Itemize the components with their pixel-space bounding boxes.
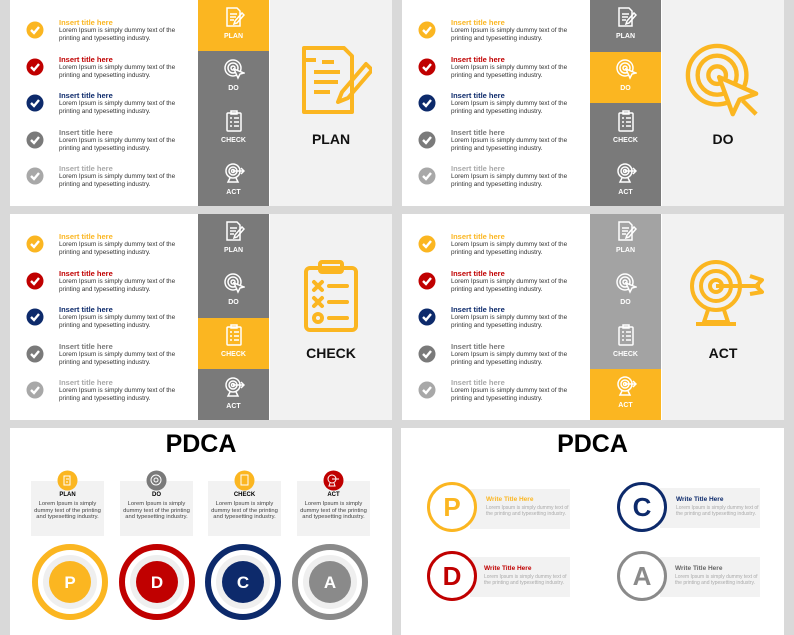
card: plan: Lorem Ipsum is simply dummy text of the printing and typesetting industry.	[34, 501, 101, 520]
item P: Lorem Ipsum is simply dummy text of	[486, 505, 569, 511]
checklist: Lorem Ipsum is simply dummy text of the	[59, 64, 175, 71]
item C: Lorem Ipsum is simply dummy text of	[676, 505, 759, 511]
card: act: Lorem Ipsum is simply dummy text of the printing and typesetting industry.	[300, 501, 367, 520]
side: act icon and label	[662, 214, 784, 420]
checklist: Insert title here	[59, 128, 113, 137]
card: act	[297, 481, 370, 536]
checklist: printing and typesetting industry.	[451, 322, 543, 329]
item P: Write Title Here	[486, 496, 533, 503]
checklist: printing and typesetting industry.	[451, 108, 543, 115]
checklist: Lorem Ipsum is simply dummy text of the	[451, 64, 567, 71]
ring circles: P	[64, 573, 76, 592]
side: plan icon and label: PLAN	[312, 131, 350, 147]
item A	[617, 551, 760, 601]
checklist: printing and typesetting industry.	[59, 181, 151, 188]
panel: check	[10, 214, 392, 420]
item A: Lorem Ipsum is simply dummy text of	[675, 574, 758, 580]
checklist: printing and typesetting industry.	[59, 322, 151, 329]
checklist: Lorem Ipsum is simply dummy text of the	[451, 27, 567, 34]
ring circles	[32, 544, 368, 620]
card: do: Lorem Ipsum is simply dummy text of the printing and typesetting industry.	[123, 501, 190, 520]
checklist: Lorem Ipsum is simply dummy text of the	[59, 387, 175, 394]
checklist: Lorem Ipsum is simply dummy text of the	[59, 27, 175, 34]
checklist: Insert title here	[451, 164, 505, 173]
checklist: Lorem Ipsum is simply dummy text of the	[59, 137, 175, 144]
step column: ACT	[226, 189, 241, 196]
checklist: Insert title here	[59, 18, 113, 27]
ring circles: A	[324, 573, 336, 592]
item P: the printing and typesetting industry.	[486, 511, 566, 517]
item C: Write Title Here	[676, 496, 723, 503]
checklist: Lorem Ipsum is simply dummy text of the	[59, 314, 175, 321]
checklist: Lorem Ipsum is simply dummy text of the	[451, 387, 567, 394]
item A: Write Title Here	[675, 565, 722, 572]
checklist: Insert title here	[451, 342, 505, 351]
title: PDCA	[557, 430, 628, 458]
checklist: printing and typesetting industry.	[451, 359, 543, 366]
checklist: Lorem Ipsum is simply dummy text of the	[59, 278, 175, 285]
item P: P	[443, 492, 461, 522]
side: act icon and label: ACT	[709, 345, 737, 361]
card: do: DO	[152, 492, 161, 498]
checklist: printing and typesetting industry.	[59, 108, 151, 115]
checklist: Insert title here	[59, 305, 113, 314]
checklist: Lorem Ipsum is simply dummy text of the	[451, 278, 567, 285]
step column: CHECK	[613, 137, 638, 144]
step column: CHECK	[221, 137, 246, 144]
step column: PLAN	[616, 247, 635, 254]
side: do icon and label: DO	[712, 131, 734, 147]
checklist: Insert title here	[451, 18, 505, 27]
step column	[590, 0, 661, 206]
panel: act	[402, 214, 784, 420]
checklist: Insert title here	[59, 232, 113, 241]
step column: ACT	[618, 189, 633, 196]
step column	[198, 0, 269, 206]
checklist: printing and typesetting industry.	[59, 72, 151, 79]
checklist	[26, 18, 175, 188]
step column: PLAN	[224, 33, 243, 40]
checklist	[26, 232, 175, 402]
checklist: printing and typesetting industry.	[451, 181, 543, 188]
item A: the printing and typesetting industry.	[675, 580, 755, 586]
card: check: Lorem Ipsum is simply dummy text of the printing and typesetting industry.	[211, 501, 278, 520]
item A: A	[633, 561, 651, 591]
step column	[198, 214, 269, 420]
item D: Write Title Here	[484, 565, 531, 572]
checklist: Lorem Ipsum is simply dummy text of the	[451, 241, 567, 248]
step column: PLAN	[224, 247, 243, 254]
checklist: Insert title here	[59, 55, 113, 64]
checklist: printing and typesetting industry.	[451, 145, 543, 152]
side: check icon and label	[270, 214, 392, 420]
card: check: CHECK	[234, 492, 255, 498]
checklist: printing and typesetting industry.	[451, 286, 543, 293]
checklist: Lorem Ipsum is simply dummy text of the	[451, 351, 567, 358]
checklist: Insert title here	[59, 378, 113, 387]
step column: CHECK	[613, 351, 638, 358]
item P	[427, 482, 570, 532]
checklist: Lorem Ipsum is simply dummy text of the	[451, 173, 567, 180]
step column: CHECK	[221, 351, 246, 358]
checklist: Insert title here	[59, 164, 113, 173]
checklist: Lorem Ipsum is simply dummy text of the	[451, 100, 567, 107]
step column: DO	[228, 299, 239, 306]
checklist: Insert title here	[451, 269, 505, 278]
card: plan: PLAN	[59, 492, 76, 498]
checklist: Insert title here	[451, 55, 505, 64]
checklist: Lorem Ipsum is simply dummy text of the	[451, 314, 567, 321]
checklist: printing and typesetting industry.	[59, 35, 151, 42]
card: act: ACT	[327, 492, 340, 498]
card: plan	[31, 481, 104, 536]
checklist: Insert title here	[59, 342, 113, 351]
ring circles: C	[237, 573, 249, 592]
checklist: printing and typesetting industry.	[451, 72, 543, 79]
checklist: Insert title here	[59, 269, 113, 278]
item D: D	[443, 561, 461, 591]
item D	[427, 551, 570, 601]
step column: DO	[620, 299, 631, 306]
step column: DO	[620, 85, 631, 92]
checklist: printing and typesetting industry.	[59, 249, 151, 256]
title: PDCA	[166, 430, 236, 458]
side: check icon and label: CHECK	[306, 345, 356, 361]
item C: the printing and typesetting industry.	[676, 511, 756, 517]
checklist: Insert title here	[59, 91, 113, 100]
side: do icon and label	[662, 0, 784, 206]
checklist: printing and typesetting industry.	[59, 395, 151, 402]
checklist: printing and typesetting industry.	[59, 286, 151, 293]
checklist: printing and typesetting industry.	[451, 395, 543, 402]
panel: pdca grid	[401, 428, 784, 635]
checklist	[418, 232, 567, 402]
panel: plan	[10, 0, 392, 206]
checklist: Insert title here	[451, 91, 505, 100]
card: do	[120, 481, 193, 536]
side: plan icon and label	[270, 0, 392, 206]
checklist: Insert title here	[451, 232, 505, 241]
step column	[590, 214, 661, 420]
checklist: Lorem Ipsum is simply dummy text of the	[59, 351, 175, 358]
checklist: printing and typesetting industry.	[451, 249, 543, 256]
step column: DO	[228, 85, 239, 92]
ring circles: D	[151, 573, 163, 592]
panel: do	[402, 0, 784, 206]
item D: the printing and typesetting industry.	[484, 580, 564, 586]
checklist: printing and typesetting industry.	[59, 359, 151, 366]
checklist: printing and typesetting industry.	[59, 145, 151, 152]
item C: C	[633, 492, 651, 522]
step column: ACT	[618, 402, 633, 409]
checklist: Lorem Ipsum is simply dummy text of the	[59, 241, 175, 248]
checklist: printing and typesetting industry.	[451, 35, 543, 42]
checklist: Insert title here	[451, 305, 505, 314]
checklist: Lorem Ipsum is simply dummy text of the	[451, 137, 567, 144]
step column: ACT	[226, 403, 241, 410]
checklist: Insert title here	[451, 378, 505, 387]
checklist: Insert title here	[451, 128, 505, 137]
item C	[617, 482, 760, 532]
panel: pdca four steps	[10, 428, 392, 635]
item D: Lorem Ipsum is simply dummy text of	[484, 574, 567, 580]
checklist: Lorem Ipsum is simply dummy text of the	[59, 100, 175, 107]
step column: PLAN	[616, 33, 635, 40]
checklist	[418, 18, 567, 188]
checklist: Lorem Ipsum is simply dummy text of the	[59, 173, 175, 180]
card: check	[208, 481, 281, 536]
